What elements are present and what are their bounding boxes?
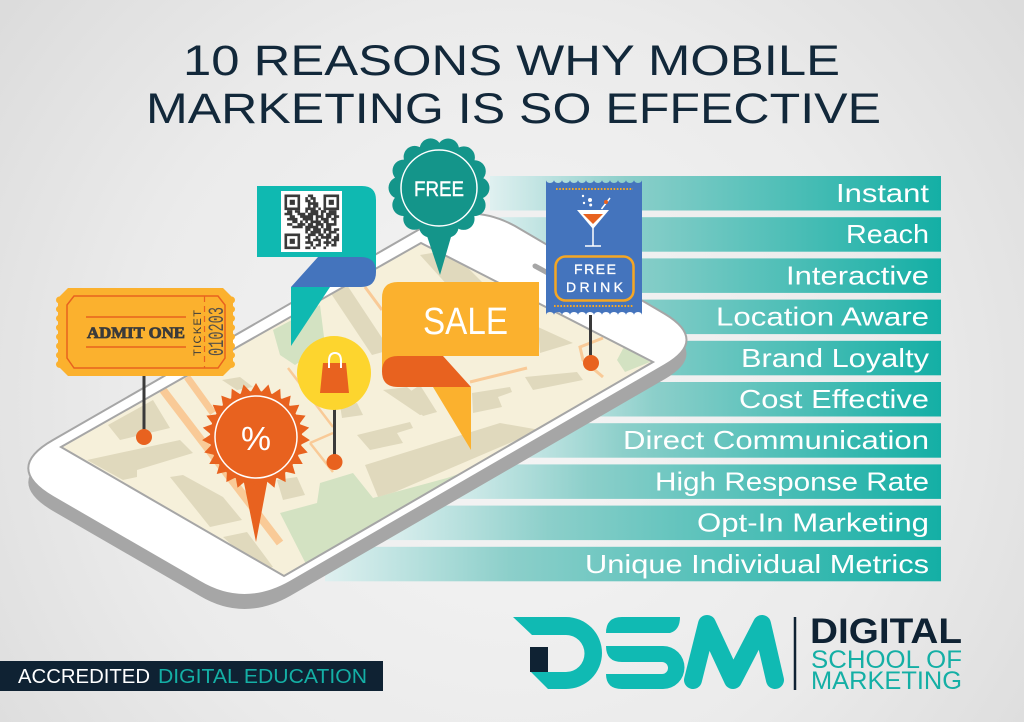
- pin: admit one ticket: ADMIT ONE: [87, 325, 185, 342]
- list of ten reasons: Instant: [836, 178, 930, 208]
- pin: sale flag: [382, 282, 539, 450]
- list of ten reasons: Reach: [846, 219, 929, 249]
- list of ten reasons: Cost Effective: [739, 384, 929, 414]
- pin: admit one ticket: [58, 288, 233, 445]
- DSM logo: MARKETING: [811, 667, 962, 695]
- list of ten reasons: Brand Loyalty: [741, 343, 929, 373]
- list of ten reasons: Interactive: [786, 260, 929, 290]
- title: [146, 37, 881, 133]
- pin: free badge: [394, 143, 484, 275]
- list of ten reasons: [325, 176, 941, 581]
- pin: QR code flag: [257, 186, 376, 346]
- list of ten reasons: High Response Rate: [655, 466, 929, 496]
- pin: admit one ticket: TICKET: [192, 310, 204, 356]
- pin: free badge: FREE: [414, 178, 464, 201]
- pin: free drink voucher: [546, 180, 642, 371]
- list of ten reasons: Opt-In Marketing: [697, 508, 929, 538]
- icon: martini: [577, 195, 610, 246]
- pin: percent badge: [202, 366, 327, 542]
- pin: admit one ticket: 010203: [205, 307, 230, 356]
- pin: shopping bag: [297, 336, 371, 470]
- list of ten reasons: Location Aware: [716, 302, 929, 332]
- list of ten reasons: Unique Individual Metrics: [585, 549, 929, 579]
- list of ten reasons: Direct Communication: [623, 425, 929, 455]
- pin: free drink voucher: FREE: [574, 261, 616, 277]
- map: [87, 250, 650, 570]
- pin: sale flag: SALE: [423, 301, 508, 343]
- DSM logo: DIGITAL: [810, 612, 962, 651]
- pin: percent badge: %: [241, 420, 271, 457]
- accreditation banner: ACCREDITED: [18, 666, 150, 688]
- pin: free drink voucher: DRINK: [566, 279, 624, 295]
- DSM logo: SCHOOL OF: [811, 646, 962, 674]
- accreditation banner: [0, 661, 383, 691]
- DSM logo: [513, 612, 962, 695]
- QR code: [284, 194, 339, 249]
- phone: [28, 214, 687, 609]
- title: 10 REASONS WHY MOBILE: [183, 37, 840, 85]
- title: MARKETING IS SO EFFECTIVE: [146, 85, 881, 133]
- accreditation banner: DIGITAL EDUCATION: [158, 666, 367, 688]
